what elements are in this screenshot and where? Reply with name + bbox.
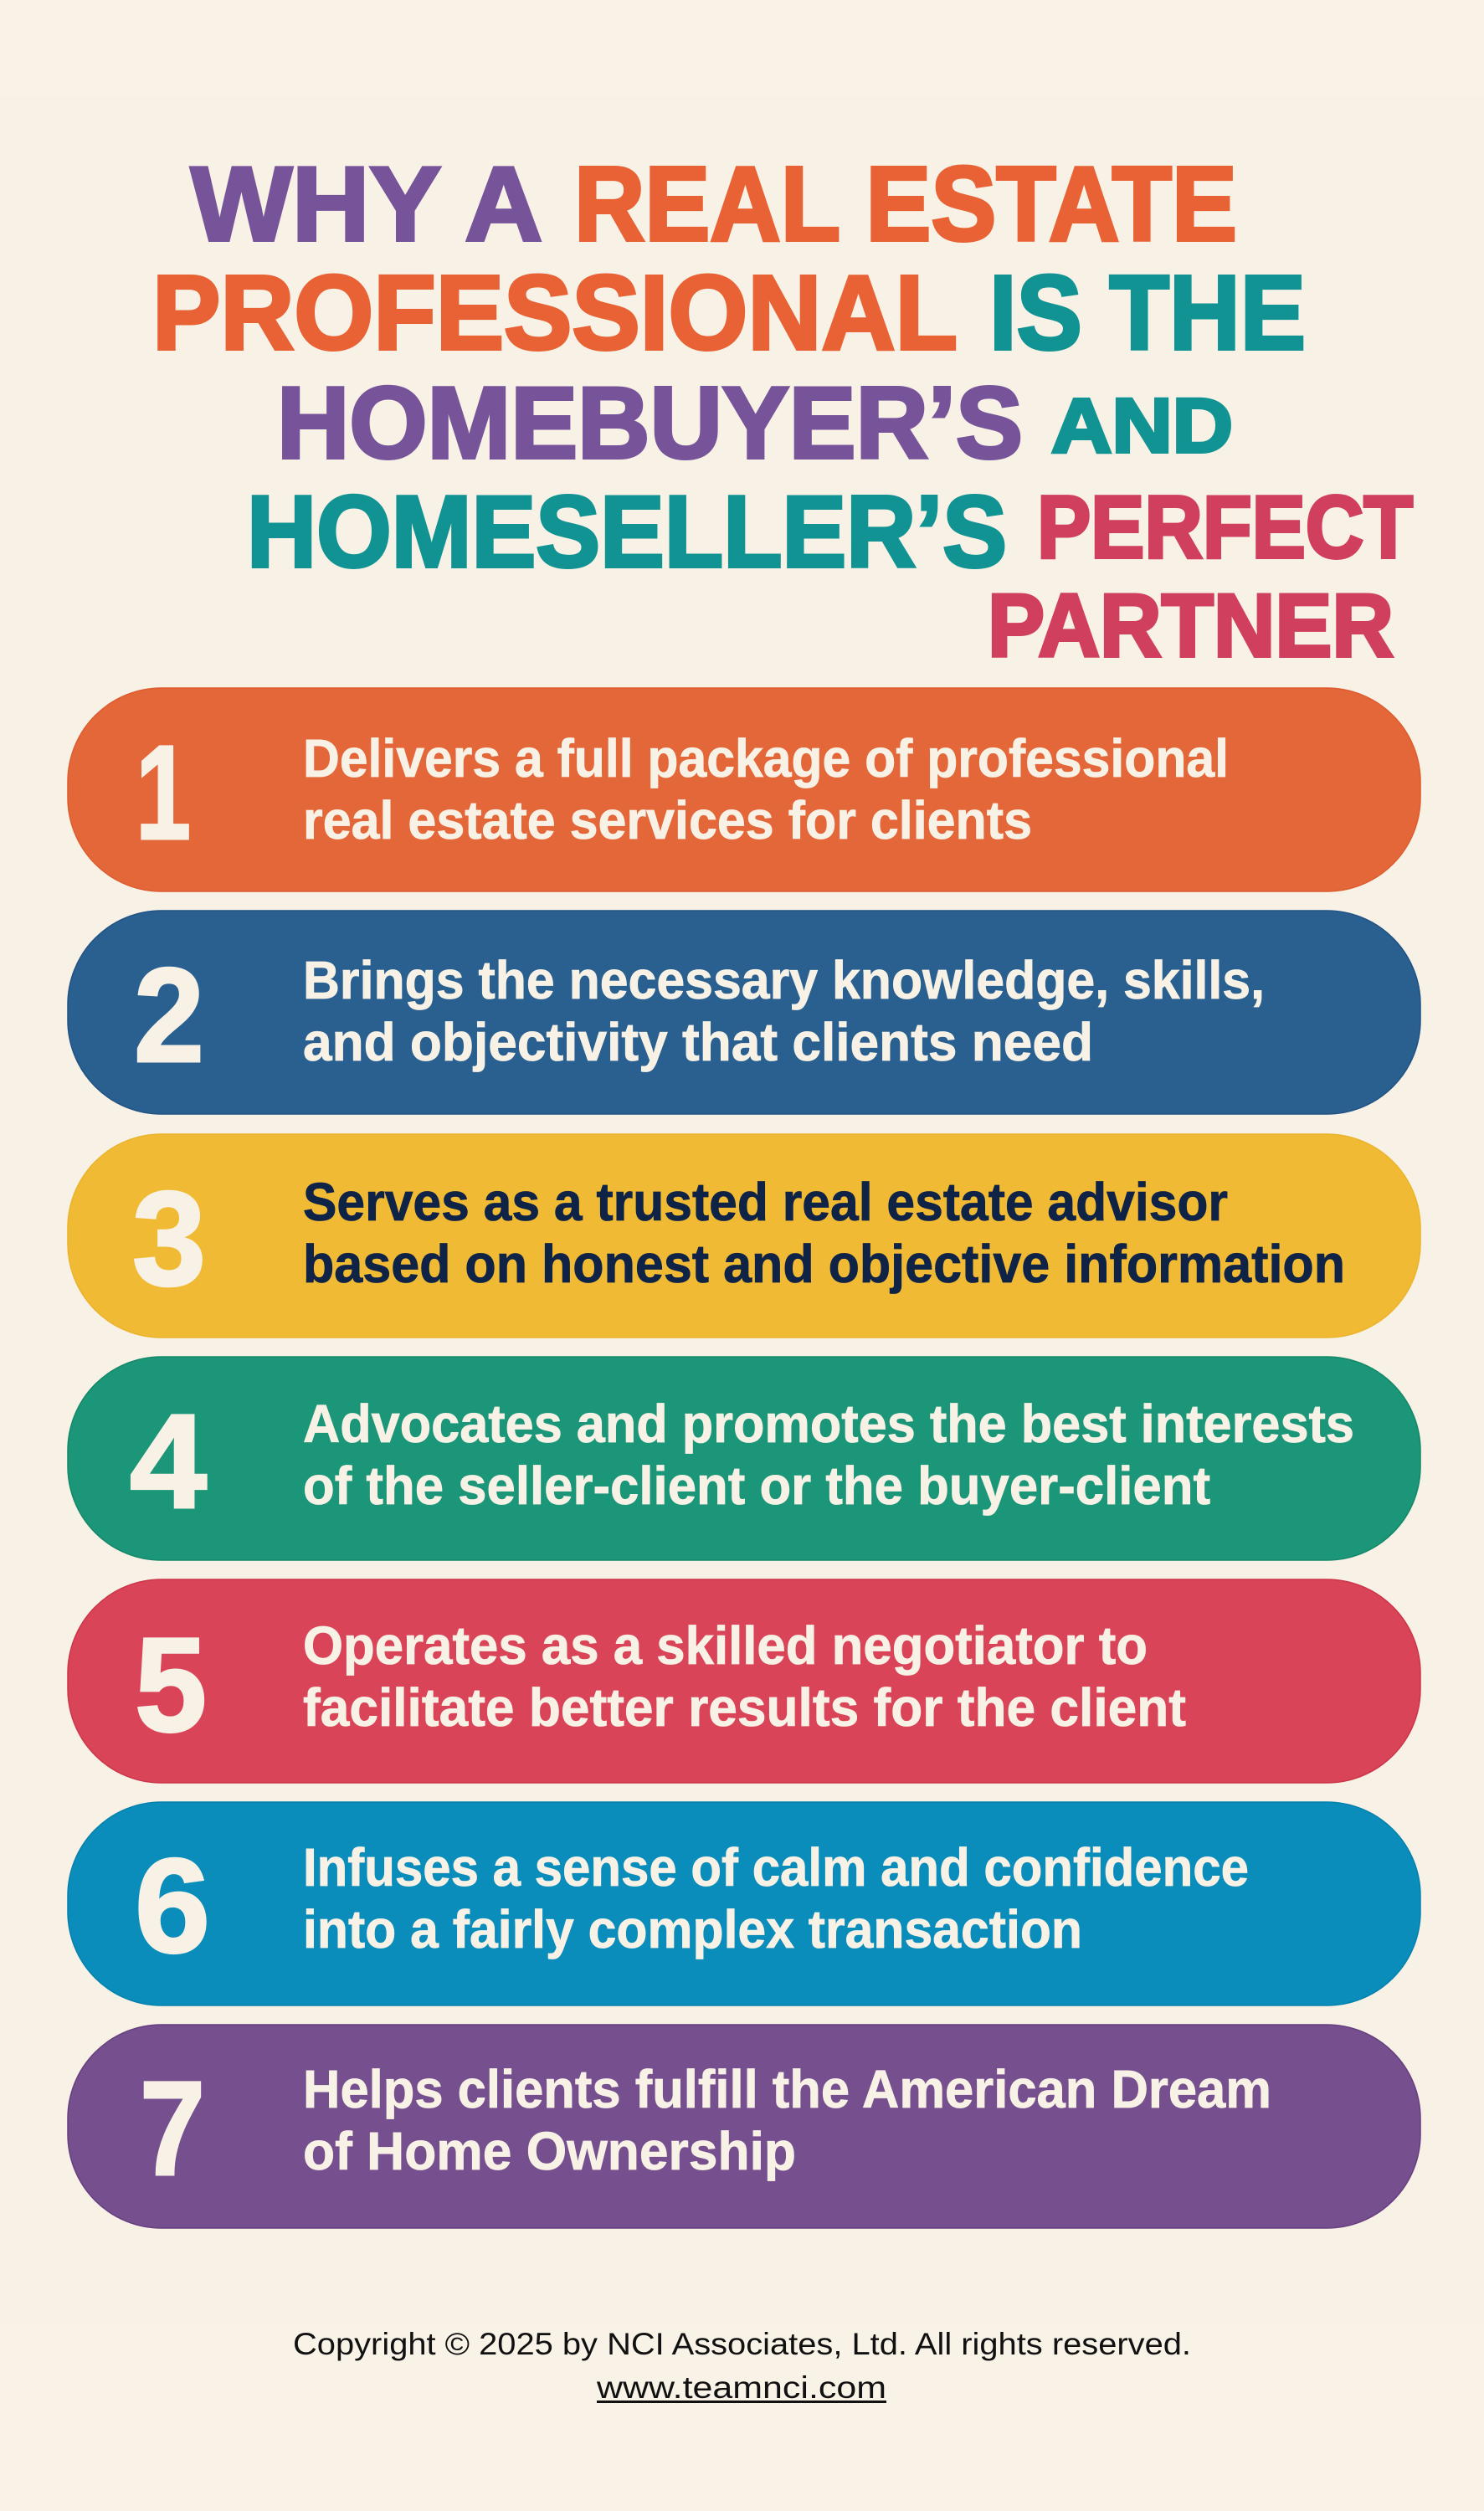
number 3: 3 [132,1163,206,1313]
pill background [68,1802,1420,2005]
pill background [68,2025,1420,2228]
title line 4: PERFECT [1037,478,1413,577]
number 2: 2 [134,940,204,1090]
panel: item 3 [68,1134,1420,1338]
pill background [68,1134,1420,1338]
number 6: 6 [135,1831,210,1980]
title [152,145,1413,675]
number 1: 1 [136,717,191,867]
text block: Advocates and promotes the best interests [303,1394,1354,1454]
panel: item 2 [68,911,1420,1114]
pill background [68,911,1420,1114]
number 7: 7 [140,2053,205,2203]
panel: item 5 [68,1579,1420,1783]
text block: facilitate better results for the client [303,1677,1186,1738]
text block: of Home Ownership [303,2121,796,2181]
copyright line: Copyright © 2025 by NCI Associates, Ltd. All rights reserved. [293,2327,1191,2361]
title line 3: AND [1051,383,1233,469]
text block: of the seller-client or the buyer-client [303,1456,1210,1516]
panel: item 1 [68,688,1420,891]
title line 1 [191,145,1237,263]
title line 5: PARTNER [988,575,1394,675]
text block: Serves as a trusted real estate advisor [303,1172,1228,1232]
text block: Delivers a full package of professional [303,728,1229,788]
pill background [68,1579,1420,1783]
text block: real estate services for clients [303,790,1032,850]
text block [303,1615,1186,1738]
pill background [68,1357,1420,1560]
pill background [68,688,1420,891]
text block: Infuses a sense of calm and confidence [303,1837,1249,1897]
number 4: 4 [130,1386,207,1536]
text block [303,728,1229,850]
text block: based on honest and objective information [303,1234,1345,1294]
panel: item 4 [68,1357,1420,1560]
title line 2: PROFESSIONAL [152,254,958,372]
title line 1: WHY A [191,145,542,263]
text block [303,1837,1249,1959]
text block: Brings the necessary knowledge, skills, [303,950,1265,1010]
text block: into a fairly complex transaction [303,1899,1082,1959]
panel: item 6 [68,1802,1420,2005]
number 5: 5 [135,1610,207,1759]
website link: www.teamnci.com [596,2370,886,2405]
title line 3: HOMEBUYER’S [277,366,1023,480]
title line 4 [247,475,1413,588]
title line 2: IS THE [989,254,1306,372]
text block: Helps clients fulfill the American Dream [303,2059,1271,2119]
text block [303,950,1265,1072]
text block: and objectivity that clients need [303,1012,1093,1072]
footer [293,2327,1191,2405]
title line 4: HOMESELLER’S [247,475,1007,588]
title line 1: REAL ESTATE [574,145,1237,263]
text block [303,1394,1354,1516]
text block [303,1172,1345,1294]
text block: Operates as a skilled negotiator to [303,1615,1148,1676]
panel: item 7 [68,2025,1420,2228]
text block [303,2059,1271,2181]
